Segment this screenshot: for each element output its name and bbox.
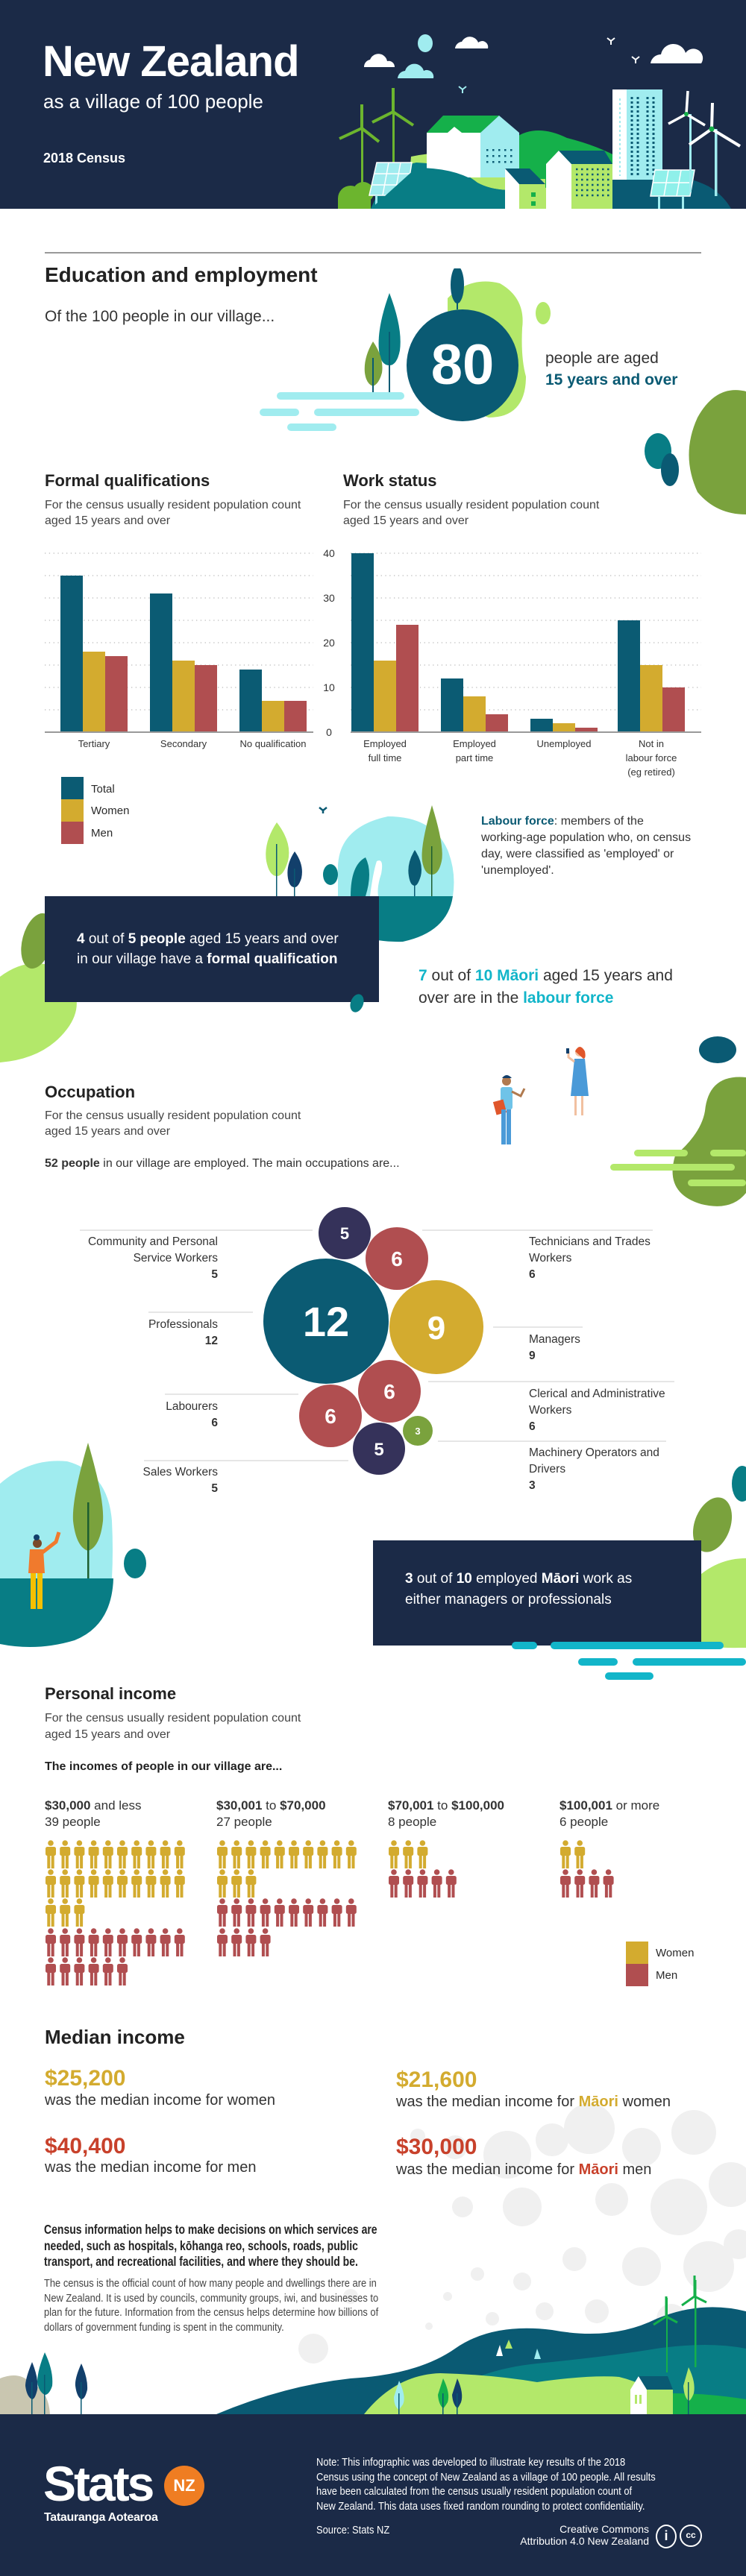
median income men: [45, 2134, 256, 2176]
median income Māori men: $30,000: [396, 2135, 477, 2159]
bar charts: qualifications and work status: 10: [323, 681, 335, 693]
median income Māori men: was the median income for Māori men: [396, 2161, 651, 2178]
bubble chart: occupations: 6: [325, 1405, 336, 1428]
text: $100,001 or more: [560, 1798, 659, 1813]
income bracket labels: 39 people: [45, 1815, 101, 1829]
title: New Zealand: [43, 37, 299, 86]
bubble chart: occupations: Machinery Operators and: [529, 1446, 659, 1459]
median income women: [45, 2066, 275, 2109]
creative commons licence: Attribution 4.0 New Zealand: [520, 2535, 649, 2547]
bubble chart: occupations: Workers: [529, 1252, 572, 1265]
labour force definition: [481, 815, 691, 877]
bubble chart: occupations: 6: [383, 1380, 395, 1403]
callout box: Māori managers/professionals: either managers or professionals: [405, 1592, 612, 1607]
decorative blobs occupation right: [610, 1036, 746, 1206]
small teal blob: [348, 992, 366, 1014]
bar charts: qualifications and work status: Employed: [453, 738, 496, 749]
footer note: New Zealand. This data uses fixed random rounding to protect confidentiality.: [316, 2499, 645, 2513]
text: $30,001 to $70,000: [216, 1798, 326, 1813]
header background: [0, 0, 746, 209]
creative commons licence: i: [664, 2528, 668, 2543]
census purpose bold paragraph: transport, and recreational facilities, and where they should be.: [44, 2254, 358, 2269]
median income Māori women: [396, 2068, 671, 2110]
bubble chart: occupations: 3: [529, 1479, 536, 1492]
footer background: [0, 2414, 746, 2576]
income bracket labels: [45, 1798, 142, 1829]
income legend: [626, 1942, 694, 1986]
text: 27 people: [216, 1815, 272, 1829]
bar charts: qualifications and work status: Tertiary: [78, 738, 110, 749]
chart legend: Men: [91, 827, 113, 840]
bubble chart: occupations: 12: [303, 1298, 349, 1345]
bar charts: qualifications and work status: labour force: [626, 752, 677, 763]
bar charts: qualifications and work status: (eg retired): [627, 766, 675, 778]
subtext occupation: For the census usually resident population count: [45, 1109, 301, 1122]
illustration: two people with phones: [492, 1047, 589, 1144]
illustration: labour force landscape: [0, 805, 454, 1062]
big number 80: 80: [431, 333, 494, 397]
labour force definition: Labour force: members of the: [481, 815, 644, 828]
subtext work status: aged 15 years and over: [343, 514, 468, 527]
bar charts: qualifications and work status: 40: [323, 547, 335, 559]
bubble chart: occupations: 9: [427, 1310, 445, 1347]
bubble chart: occupations: 5: [211, 1268, 218, 1281]
text: people aged 15 and over: 15 years and over: [545, 371, 677, 388]
bubble chart: occupations: Labourers: [166, 1400, 218, 1413]
heading: Work status: Work status: [343, 471, 437, 490]
bar charts: qualifications and work status: No qualification: [240, 738, 306, 749]
bubble chart: occupations: Service Workers: [134, 1252, 218, 1265]
callout box: formal qualification: 4 out of 5 people aged 15 years and over: [77, 931, 339, 947]
intro text: Of the 100 people in our village...: [45, 308, 275, 325]
text: people aged 15 and over: people are aged: [545, 350, 659, 367]
heading: Education and employment: Education and employment: [45, 263, 318, 286]
logo: Stats NZ: NZ: [173, 2476, 195, 2495]
bubble chart: occupations: 5: [211, 1482, 218, 1495]
census description paragraph: New Zealand. It is used by councils, community groups, iwi, and businesses to: [44, 2292, 378, 2304]
chart legend: Total: [91, 783, 115, 796]
census purpose bold paragraph: needed, such as hospitals, kōhanga reo, schools, roads, public: [44, 2238, 358, 2253]
census description paragraph: The census is the official count of how many people and dwellings there are in: [44, 2277, 377, 2290]
bar charts: qualifications and work status: 20: [323, 637, 335, 649]
median income women: $25,200: [45, 2066, 125, 2091]
creative commons licence: cc: [686, 2530, 696, 2540]
creative commons licence: [520, 2523, 702, 2548]
text: 6 people: [560, 1815, 608, 1829]
callout: Māori labour force: 7 out of 10 Māori aged 15 years and: [419, 967, 673, 984]
income legend: Men: [656, 1969, 677, 1982]
census purpose bold paragraph: Census information helps to make decisions on which services are: [44, 2222, 377, 2237]
bubble chart: occupations: Technicians and Trades: [529, 1235, 651, 1248]
footer note: [316, 2456, 656, 2513]
bubble chart: occupations: Community and Personal: [88, 1235, 218, 1248]
subtext occupation: [45, 1109, 301, 1138]
creative commons licence: Creative Commons: [560, 2523, 649, 2535]
subtitle: as a village of 100 people: [43, 90, 263, 113]
footer note: have been calculated from the census usually resident population count of: [316, 2485, 632, 2498]
median income women: was the median income for women: [45, 2092, 275, 2109]
pictogram: income by gender: [46, 1840, 614, 1985]
text: $70,001 to $100,000: [388, 1798, 504, 1813]
callout box: Māori managers/professionals: 3 out of 10 employed Māori work as: [405, 1571, 632, 1587]
logo: Stats NZ: Tatauranga Aotearoa: [44, 2511, 158, 2524]
census description paragraph: [44, 2277, 379, 2334]
illustration: person pointing at tree: [0, 1443, 746, 1648]
bubble chart: occupations: Professionals: [148, 1318, 218, 1331]
bottom landscape illustration: [0, 2276, 746, 2414]
bubble chart: occupations: Managers: [529, 1333, 580, 1346]
text: 8 people: [388, 1815, 436, 1829]
illustration: 80 circle with trees: [260, 268, 746, 514]
logo: Stats NZ: [43, 2456, 204, 2524]
heading: Personal income: Personal income: [45, 1684, 176, 1703]
median income Māori women: was the median income for Māori women: [396, 2094, 671, 2110]
bubble chart: occupations: 6: [529, 1420, 536, 1433]
subtext personal income: aged 15 years and over: [45, 1728, 170, 1741]
chart legend: [61, 777, 129, 844]
callout box: formal qualification: [45, 896, 379, 1002]
bar charts: qualifications and work status: [45, 547, 701, 778]
median income Māori men: [396, 2135, 651, 2178]
decorative dotted circles background: [298, 2103, 746, 2364]
subtext personal income: [45, 1712, 301, 1741]
bubble chart: occupations: 5: [340, 1224, 349, 1243]
callout: Māori labour force: [419, 967, 673, 1007]
bubble chart: occupations: [80, 1207, 674, 1495]
bubble chart: occupations: Sales Workers: [143, 1466, 218, 1478]
chart legend: Women: [91, 804, 129, 817]
footer note: Note: This infographic was developed to illustrate key results of the 2018: [316, 2456, 625, 2469]
bubble chart: occupations: Workers: [529, 1404, 572, 1417]
subtext work status: [343, 499, 600, 527]
subtext work status: For the census usually resident population count: [343, 499, 599, 511]
income bracket labels: $30,000 and less: [45, 1798, 142, 1813]
callout box: formal qualification: in our village have a formal qualification: [77, 951, 338, 967]
bubble chart: occupations: 6: [211, 1417, 218, 1429]
heading: Occupation: Occupation: [45, 1083, 135, 1101]
census year label: 2018 Census: [43, 151, 125, 166]
census description paragraph: dollars of government funding is spent in the community.: [44, 2320, 284, 2334]
source: Source: Stats NZ: [316, 2524, 389, 2536]
heading: Formal qualifications: Formal qualifications: [45, 471, 210, 490]
bubble chart: occupations: 9: [529, 1350, 536, 1362]
bar charts: qualifications and work status: 0: [326, 726, 332, 738]
bubble chart: occupations: 6: [391, 1247, 403, 1270]
median income Māori women: $21,600: [396, 2068, 477, 2092]
bar charts: qualifications and work status: part time: [456, 752, 493, 763]
subtext formal qualifications: aged 15 years and over: [45, 514, 170, 527]
subtext formal qualifications: For the census usually resident population count: [45, 499, 301, 511]
census purpose bold paragraph: [44, 2222, 377, 2269]
bubble chart: occupations: 12: [205, 1335, 218, 1347]
labour force definition: day, were classified as 'employed' or: [481, 848, 674, 860]
section divider: [45, 252, 701, 253]
employed intro: 52 people in our village are employed. The main occupations are...: [45, 1157, 400, 1170]
census description paragraph: plan for the future. Information from the census helps determine how billions of: [44, 2306, 378, 2319]
subtext formal qualifications: [45, 499, 301, 527]
cyan dashes under callout: [512, 1642, 746, 1680]
bar charts: qualifications and work status: Unemployed: [537, 738, 591, 749]
labour force definition: 'unemployed'.: [481, 864, 554, 877]
median income men: was the median income for men: [45, 2159, 256, 2176]
bubble chart: occupations: 6: [529, 1268, 536, 1281]
bubble chart: occupations: 5: [374, 1440, 384, 1460]
bar charts: qualifications and work status: Secondary: [160, 738, 207, 749]
income legend: Women: [656, 1947, 694, 1959]
heading: Median income: Median income: [45, 2026, 185, 2048]
logo: Stats NZ: Stats: [43, 2456, 152, 2511]
header illustration: village with windmills: [338, 34, 741, 209]
subtext occupation: aged 15 years and over: [45, 1125, 170, 1138]
bubble chart: occupations: Drivers: [529, 1463, 565, 1476]
bar charts: qualifications and work status: Employed: [363, 738, 407, 749]
footer note: Census using the concept of New Zealand as a village of 100 people. All results: [316, 2471, 656, 2483]
labour force definition: working-age population who, on census: [481, 831, 691, 844]
bar charts: qualifications and work status: full time: [369, 752, 401, 763]
incomes intro: The incomes of people in our village are...: [45, 1760, 282, 1773]
bar charts: qualifications and work status: Not in: [639, 738, 664, 749]
bubble chart: occupations: 3: [415, 1426, 421, 1437]
callout box: Māori managers/professionals: [373, 1540, 701, 1646]
bar charts: qualifications and work status: 30: [323, 592, 335, 604]
median income men: $40,400: [45, 2134, 125, 2158]
text: people aged 15 and over: [545, 350, 677, 388]
bubble chart: occupations: Clerical and Administrative: [529, 1388, 665, 1400]
callout: Māori labour force: over are in the labour force: [419, 989, 613, 1007]
subtext personal income: For the census usually resident population count: [45, 1712, 301, 1725]
